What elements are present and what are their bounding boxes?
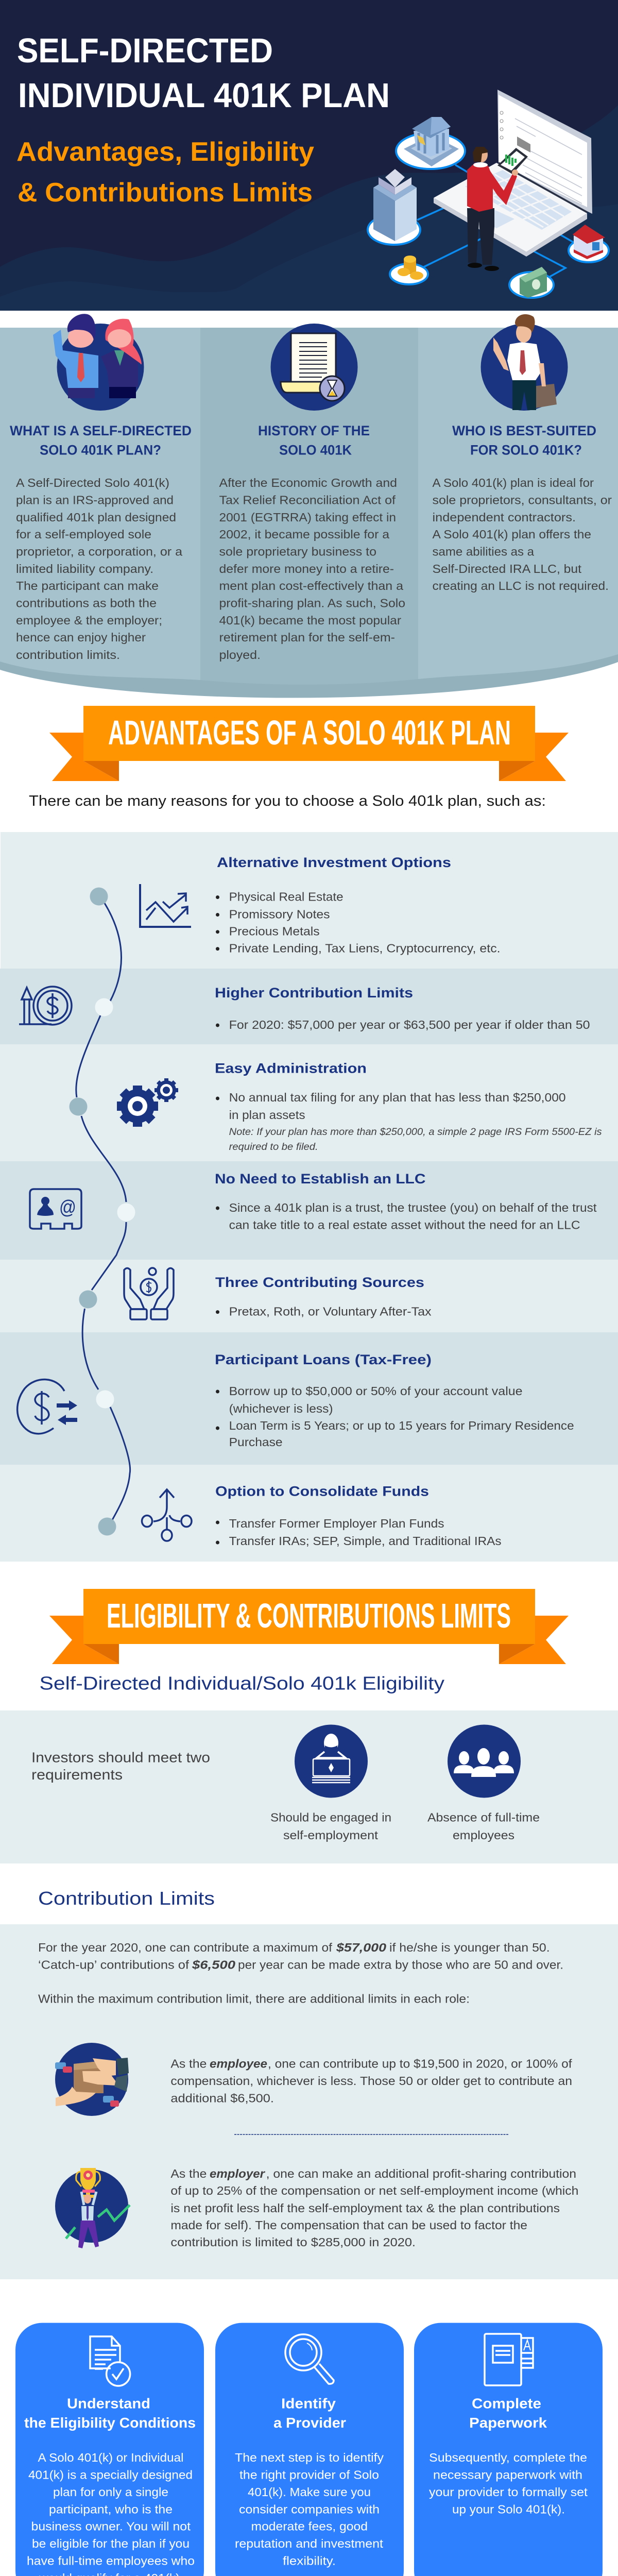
item: alternative investment options: Promissory Notes [229, 908, 330, 921]
item: no need to establish an LLC [30, 1171, 597, 1232]
ribbon heading: eligibility [49, 1589, 569, 1664]
card: understand the eligibility conditions: participant, who is the [49, 2503, 173, 2516]
text: self-employment requirement: self-employment [283, 1828, 379, 1842]
text: advantages intro: There can be many reasons for you to choose a Solo 401k plan, such as: [29, 793, 546, 809]
card: identify a provider: the right provider of Solo [239, 2468, 379, 2481]
text: what is a self-directed solo 401k: hence can enjoy higher [16, 631, 146, 644]
icon: scroll and hourglass [271, 324, 357, 411]
panel: three intro columns [0, 314, 618, 698]
text: requirements intro: requirements [31, 1767, 123, 1783]
text: employee limit: employee [210, 2057, 267, 2071]
heading: eligibility: Self-Directed Individual/Solo 401k Eligibility [39, 1673, 444, 1694]
card: complete paperwork [414, 2323, 603, 2576]
panel: contribution limits [0, 1924, 618, 2279]
text: what is a self-directed solo 401k: employee & the employer; [16, 614, 162, 627]
item: no need to establish an LLC: Since a 401k plan is a trust, the trustee (you) on behalf of the trust [229, 1201, 597, 1214]
text: who is best-suited: same abilities as a [433, 545, 534, 558]
illustration: house [569, 225, 609, 262]
text: what is a self-directed solo 401k: proprietor, a corporation, or a [16, 545, 182, 558]
item: three contributing sources: Three Contributing Sources [215, 1275, 424, 1290]
item: alternative investment options: Precious Metals [229, 925, 320, 938]
title [17, 31, 390, 115]
text: what is a self-directed solo 401k: qualified 401k plan designed [16, 511, 176, 524]
item: easy administration: No annual tax filing for any plan that has less than $250,000 [229, 1091, 566, 1104]
text: history of the solo 401k: retirement plan for the self-em- [219, 631, 395, 644]
illustration: laptop [434, 90, 592, 257]
text: self-employment requirement: Should be engaged in [270, 1811, 391, 1824]
icon: chart [140, 884, 191, 927]
text: employee limit [170, 2057, 572, 2105]
title: SELF-DIRECTED [17, 31, 273, 70]
text: what is a self-directed solo 401k: The participant can make [16, 579, 159, 592]
item: higher contribution limits: For 2020: $57,000 per year or $63,500 per year if older than 50 [229, 1018, 590, 1031]
icon: magnifying glass [285, 2334, 334, 2384]
card: identify a provider: 401(k). Make sure you [248, 2485, 371, 2499]
text: yearly maximum: $6,500 [192, 1958, 235, 1971]
heading: contribution limits: Contribution Limits [38, 1888, 215, 1909]
item: easy administration [117, 1060, 602, 1153]
panel: eligibility requirements [0, 1710, 618, 1863]
card: understand the eligibility conditions: A Solo 401(k) or Individual [38, 2451, 183, 2464]
panel: advantages list [0, 832, 618, 1562]
icon: contact card: @ [59, 1197, 76, 1218]
text: history of the solo 401k: ment plan cost-effectively than a [219, 579, 403, 592]
illustration: bank [396, 117, 465, 169]
item: alternative investment options: Physical Real Estate [229, 890, 344, 904]
item: alternative investment options: Alternative Investment Options [217, 855, 451, 870]
card: complete paperwork: Subsequently, complete the [429, 2451, 587, 2464]
icon: employer with trophy [55, 2168, 130, 2248]
item: participant loans: Borrow up to $50,000 or 50% of your account value [229, 1384, 523, 1398]
text: what is a self-directed solo 401k: contribution limits. [16, 648, 120, 662]
card: understand the eligibility conditions: have full-time employees who [27, 2554, 195, 2568]
card: identify a provider: The next step is to identify [235, 2451, 384, 2464]
item: participant loans: Purchase [229, 1435, 283, 1449]
text: yearly maximum [38, 1941, 563, 2005]
title: INDIVIDUAL 401K PLAN [18, 76, 390, 115]
icon: document with check [90, 2336, 130, 2386]
panel: header [0, 0, 618, 311]
text: yearly maximum: For the year 2020, one can contribute a maximum of [38, 1941, 333, 1954]
text: what is a self-directed solo 401k: contributions as both the [16, 597, 157, 610]
item: higher contribution limits [19, 985, 590, 1031]
item: option to consolidate funds: Transfer IRAs; SEP, Simple, and Traditional IRAs [229, 1534, 502, 1548]
icon: contact card [30, 1189, 81, 1229]
text: who is best-suited: Self-Directed IRA LLC, but [433, 562, 582, 575]
card: identify a provider: consider companies with [239, 2503, 380, 2516]
item: participant loans: (whichever is less) [229, 1402, 333, 1415]
text: who is best-suited: WHO IS BEST-SUITED [452, 423, 596, 438]
card: understand the eligibility conditions: be eligible for the plan if you [32, 2537, 190, 2550]
text: who is best-suited: FOR SOLO 401K? [470, 442, 582, 457]
illustration: coins [390, 256, 428, 284]
icon: binder [485, 2334, 533, 2385]
text: history of the solo 401k: ployed. [219, 648, 261, 662]
card: identify a provider: a Provider [273, 2415, 346, 2431]
icon: dollar exchange [18, 1380, 77, 1434]
text: who is best-suited: A Solo 401(k) plan is ideal for [433, 476, 594, 489]
card: identify a provider: Identify [281, 2396, 336, 2412]
text: history of the solo 401k: defer more money into a retire- [219, 562, 394, 575]
card: complete paperwork: necessary paperwork with [433, 2468, 582, 2481]
item: participant loans [18, 1352, 574, 1449]
text: employee limit: compensation, whichever is less. Those 50 or older get to contribute an [170, 2074, 572, 2088]
item: alternative investment options: Private Lending, Tax Liens, Cryptocurrency, etc. [229, 942, 501, 955]
card: complete paperwork: up your Solo 401(k). [452, 2503, 565, 2516]
card: understand the eligibility conditions: the Eligibility Conditions [24, 2415, 196, 2431]
illustration: tower [368, 169, 420, 245]
text: yearly maximum: if he/she is younger than 50. [389, 1941, 550, 1954]
icon: self-employed person [295, 1725, 368, 1798]
item: easy administration: required to be filed. [229, 1142, 318, 1153]
card: understand the eligibility conditions: Understand [67, 2396, 150, 2412]
text: requirements intro [31, 1750, 210, 1783]
card: understand the eligibility conditions: 401(k) is a specially designed [28, 2468, 193, 2481]
text: yearly maximum: $57,000 [336, 1941, 386, 1954]
item: participant loans: Loan Term is 5 Years; or up to 15 years for Primary Residence [229, 1419, 574, 1432]
icon: coin with arrow [19, 987, 72, 1025]
text: history of the solo 401k: 2002, it became possible for a [219, 528, 389, 541]
text: yearly maximum: per year can be made extra by those who are 50 and over. [238, 1958, 563, 1971]
card: complete paperwork: Paperwork [469, 2415, 547, 2431]
item: three contributing sources: Pretax, Roth, or Voluntary After-Tax [229, 1305, 432, 1318]
item: three contributing sources [124, 1268, 432, 1319]
text: what is a self-directed solo 401k [10, 423, 192, 662]
text: what is a self-directed solo 401k: limited liability company. [16, 562, 153, 575]
subtitle: & Contributions Limits [18, 178, 313, 208]
card: understand the eligibility conditions: plan for only a single [53, 2485, 168, 2499]
text: history of the solo 401k: 401(k) became the most popular [219, 614, 401, 627]
text: employer limit: made for self). The compensation that can be used to factor the [170, 2218, 527, 2232]
icon: confused couple [53, 314, 144, 411]
text: employer limit: As the [170, 2167, 207, 2180]
text: history of the solo 401k: 2001 (EGTRRA) taking effect in [219, 511, 396, 524]
text: history of the solo 401k: Tax Relief Reconciliation Act of [219, 493, 396, 506]
text: employer limit: employer [210, 2167, 265, 2180]
illustration: investor with tablet [467, 147, 528, 271]
text: who is best-suited: creating an LLC is not required. [433, 579, 609, 592]
item: easy administration: Easy Administration [215, 1060, 367, 1076]
text: what is a self-directed solo 401k: for a self-employed sole [16, 528, 151, 541]
card: complete paperwork: Complete [472, 2396, 541, 2412]
text: self-employment requirement [270, 1811, 391, 1842]
item: alternative investment options [140, 855, 501, 955]
text: no employees requirement: employees [453, 1828, 514, 1842]
item: participant loans: Participant Loans (Tax-Free) [215, 1352, 432, 1367]
icon: hands holding coin [124, 1268, 174, 1319]
card: understand the eligibility conditions: business owner. You will not [31, 2519, 191, 2533]
timeline dots [69, 887, 135, 1535]
card: complete paperwork: your provider to formally set [429, 2485, 588, 2499]
text: who is best-suited: independent contractors. [433, 511, 576, 524]
text: who is best-suited: sole proprietors, consultants, or [433, 493, 612, 506]
text: no employees requirement [427, 1811, 540, 1842]
text: employee limit: As the [170, 2057, 207, 2071]
text: what is a self-directed solo 401k: WHAT IS A SELF-DIRECTED [10, 423, 192, 438]
illustration: connector lines [417, 165, 573, 278]
text: who is best-suited [433, 423, 612, 592]
item: option to consolidate funds [142, 1484, 502, 1548]
subtitle: Advantages, Eligibility [16, 137, 314, 167]
timeline curve [76, 903, 130, 1520]
text: employer limit: of up to 25% of the compensation or net self-employment income (which [170, 2184, 578, 2197]
ribbon heading: advantages [49, 706, 569, 781]
item: no need to establish an LLC: No Need to Establish an LLC [215, 1171, 425, 1187]
text: what is a self-directed solo 401k: plan is an IRS-approved and [16, 493, 174, 506]
text: what is a self-directed solo 401k: A Self-Directed Solo 401(k) [16, 476, 169, 489]
text: who is best-suited: A Solo 401(k) plan offers the [433, 528, 591, 541]
text: employer limit: , one can make an additional profit-sharing contribution [266, 2167, 576, 2180]
item: easy administration: in plan assets [229, 1108, 305, 1122]
text: history of the solo 401k: SOLO 401K [279, 442, 352, 457]
text: employer limit [170, 2167, 578, 2249]
text: employee limit: additional $6,500. [170, 2092, 274, 2105]
card: identify a provider [215, 2323, 404, 2576]
icon: employee handing box [55, 2043, 129, 2116]
text: yearly maximum: Within the maximum contribution limit, there are additional limits in each role: [38, 1992, 470, 2005]
item: option to consolidate funds: Option to Consolidate Funds [215, 1484, 429, 1499]
item: no need to establish an LLC: can take title to a real estate asset without the need for an LLC [229, 1218, 580, 1232]
item: higher contribution limits: Higher Contribution Limits [215, 985, 413, 1001]
text: history of the solo 401k: profit-sharing plan. As such, Solo [219, 597, 405, 610]
text: history of the solo 401k: sole proprietary business to [219, 545, 376, 558]
text: employer limit: contribution is limited to $285,000 in 2020. [170, 2235, 416, 2249]
text: history of the solo 401k [219, 423, 405, 662]
text: yearly maximum: ‘Catch-up’ contributions of [38, 1958, 190, 1971]
icon: merging arrows [142, 1489, 192, 1541]
card: identify a provider: reputation and investment [235, 2537, 384, 2550]
item: option to consolidate funds: Transfer Former Employer Plan Funds [229, 1517, 444, 1530]
text: history of the solo 401k: HISTORY OF THE [258, 423, 370, 438]
card: understand the eligibility conditions [15, 2323, 204, 2576]
icon: businessman thumbs up [481, 314, 568, 411]
card: identify a provider: flexibility. [283, 2554, 336, 2568]
text: employee limit: , one can contribute up to $19,500 in 2020, or 100% of [268, 2057, 572, 2071]
text: history of the solo 401k: After the Economic Growth and [219, 476, 397, 489]
illustration: money [509, 267, 554, 298]
text: requirements intro: Investors should meet two [31, 1750, 210, 1766]
item: easy administration: Note: If your plan has more than $250,000, a simple 2 page IRS Form 5500-EZ is [229, 1127, 602, 1138]
text: employer limit: is net profit less half the self-employment tax & the plan contributions [170, 2201, 560, 2215]
text: what is a self-directed solo 401k: SOLO 401K PLAN? [40, 442, 161, 457]
icon: gears [117, 1078, 178, 1127]
card: identify a provider: moderate fees, good [251, 2519, 368, 2533]
subtitle [16, 137, 314, 208]
text: no employees requirement: Absence of full-time [427, 1811, 540, 1824]
icon: employees group [448, 1725, 521, 1798]
